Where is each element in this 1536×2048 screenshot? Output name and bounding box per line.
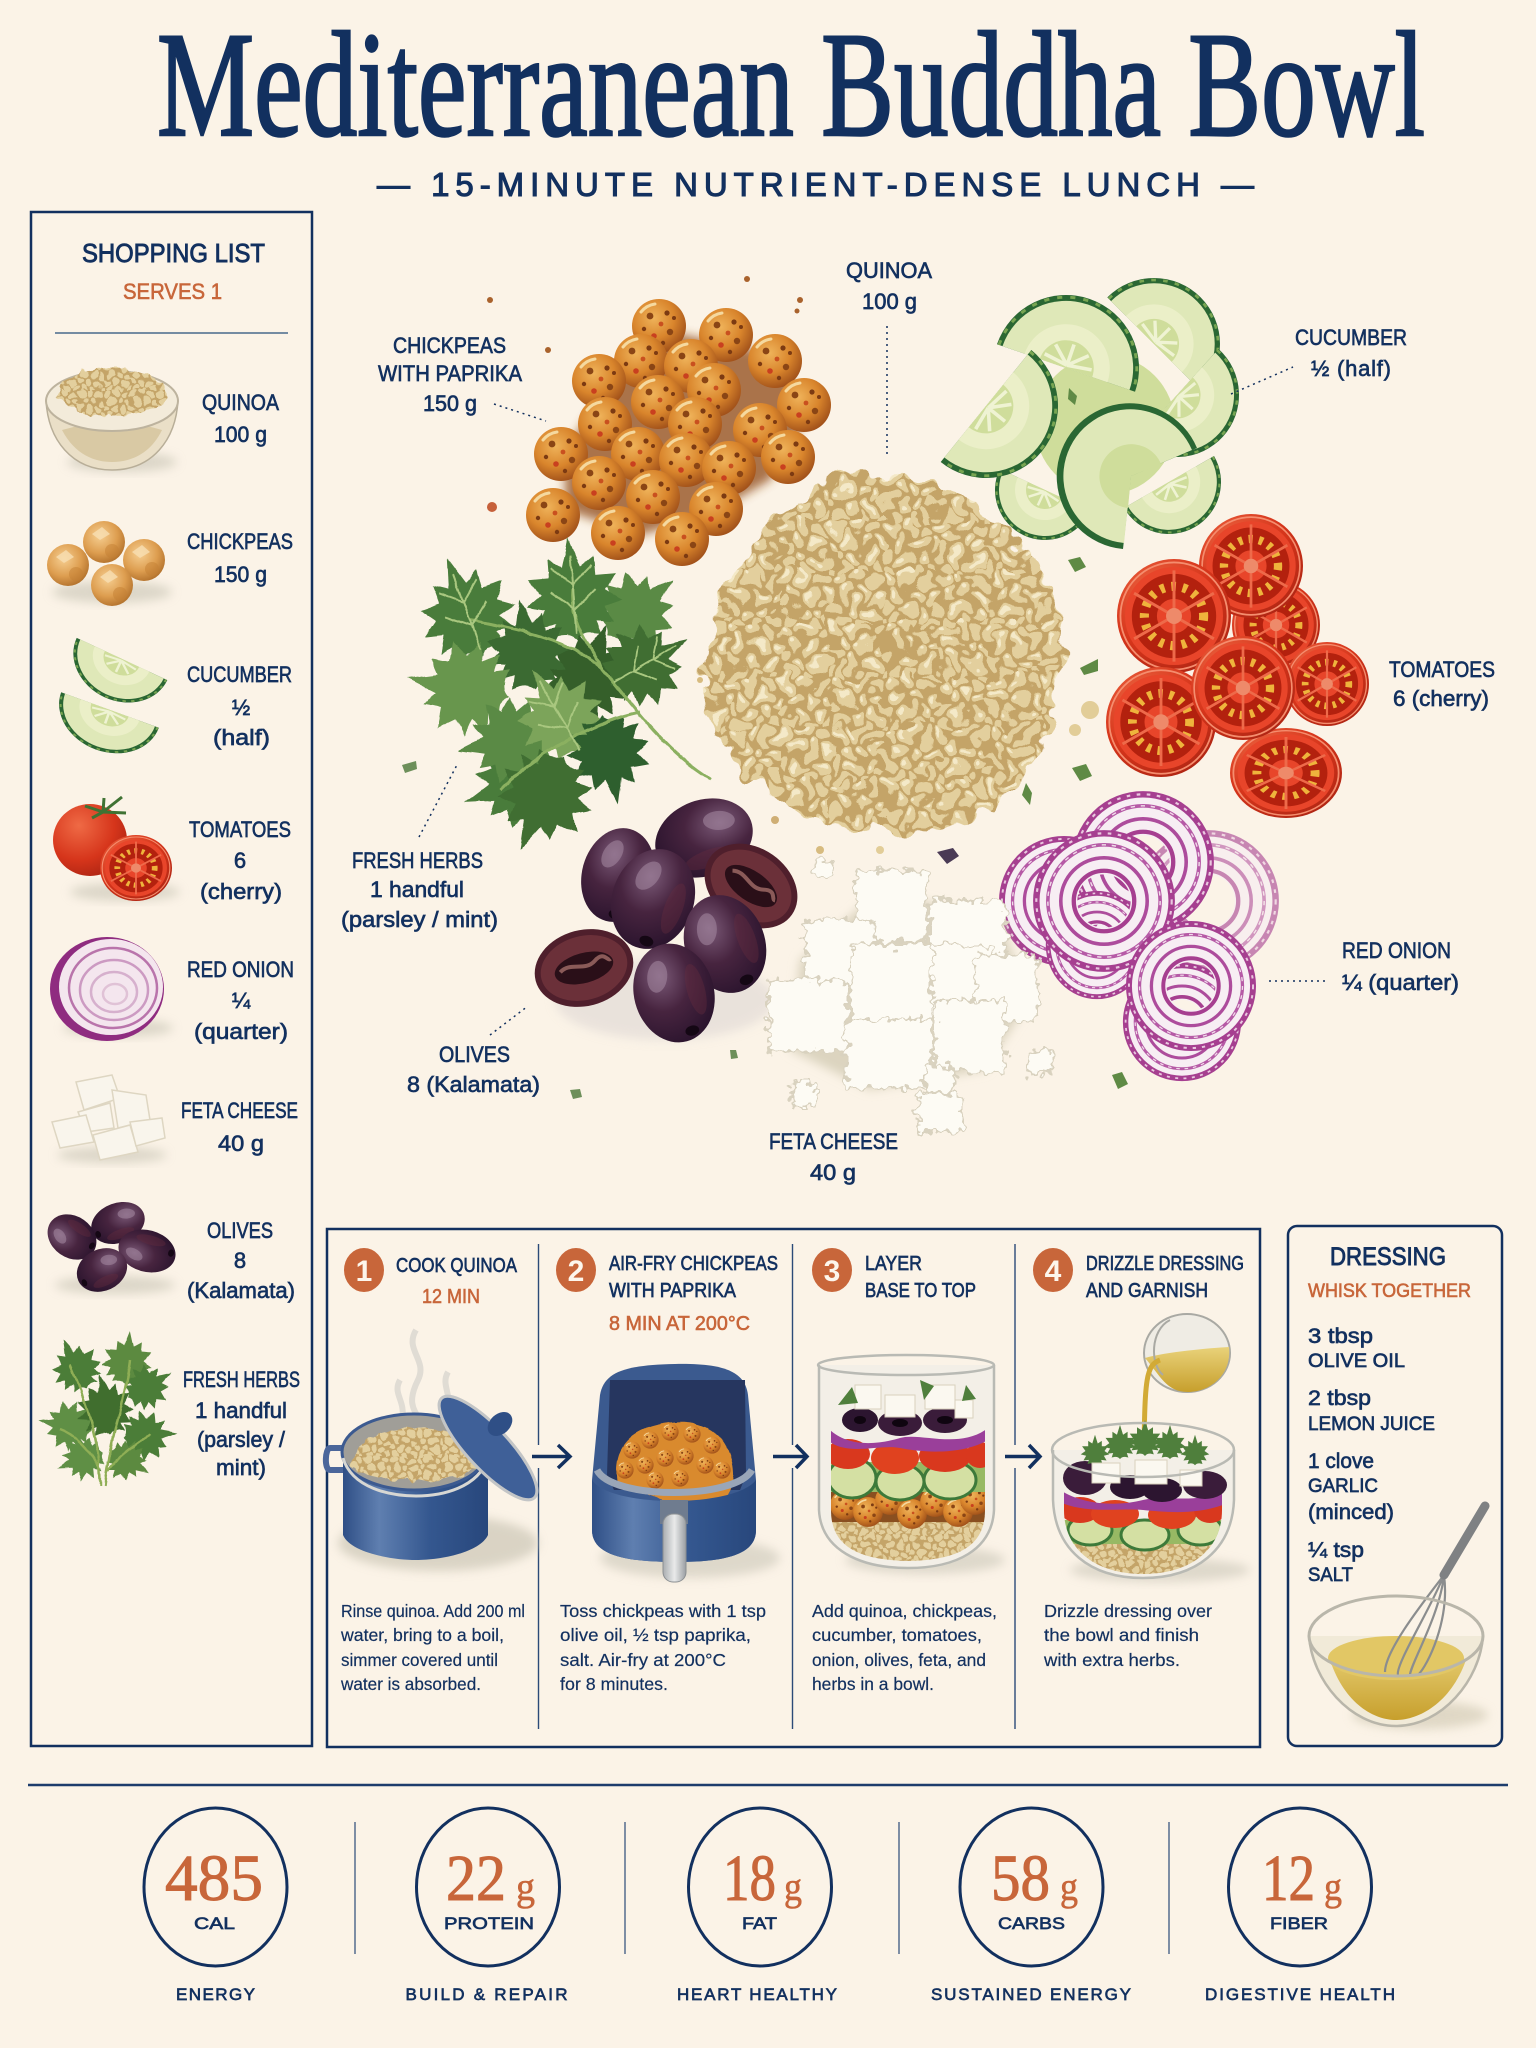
label: chickpeas 150 g	[187, 529, 293, 587]
label: cucumber 1/2 half: ½	[232, 695, 250, 720]
step 2	[556, 1248, 780, 1694]
step number 4	[1033, 1248, 1073, 1292]
step 1 instructions	[340, 1601, 525, 1694]
label: olives 8 kalamata: (Kalamata)	[187, 1278, 295, 1303]
step 2 instructions: for 8 minutes.	[560, 1674, 668, 1694]
label: cucumber 1/2 half	[187, 662, 292, 750]
item: fresh herbs	[34, 1329, 300, 1491]
illustration: olives	[526, 785, 814, 1052]
stat: fat: 18	[723, 1842, 776, 1915]
step 2 instructions: olive oil, ½ tsp paprika,	[560, 1625, 751, 1645]
item: tomatoes	[53, 797, 291, 904]
label: olives 8 kalamata: OLIVES	[207, 1218, 273, 1243]
step 3 instructions: Add quinoa, chickpeas,	[812, 1601, 997, 1621]
ingredient: lemon juice: 2 tbsp	[1308, 1387, 1371, 1410]
label: fresh herbs: (parsley / mint)	[341, 907, 498, 932]
label: red onion 1/4 quarter: RED ONION	[187, 957, 294, 982]
label: fresh herbs 1 handful: 1 handful	[195, 1398, 287, 1423]
step 4	[1033, 1248, 1250, 1670]
step 2 instructions: salt. Air-fry at 200°C	[560, 1650, 726, 1670]
ingredient: salt: ¼ tsp	[1308, 1539, 1364, 1562]
stat: fat: g	[784, 1864, 802, 1909]
label: olives	[407, 1042, 540, 1097]
stat: protein: BUILD & REPAIR	[406, 1985, 568, 2004]
label: fresh herbs 1 handful: FRESH HERBS	[183, 1367, 300, 1392]
step 3 heading: BASE TO TOP	[865, 1280, 976, 1302]
stat: fiber: FIBER	[1270, 1914, 1328, 1933]
stat: fat: HEART HEALTHY	[677, 1985, 837, 2004]
shopping list heading: SHOPPING LIST	[82, 238, 265, 268]
step 4 instructions: Drizzle dressing over	[1044, 1601, 1212, 1621]
panel: shopping list	[31, 212, 312, 1746]
step number 3	[812, 1248, 852, 1292]
icon: tomatoes	[53, 797, 180, 901]
stat: protein: g	[516, 1864, 535, 1909]
item: olives	[39, 1195, 295, 1303]
stat: protein: 22	[446, 1842, 506, 1915]
whisk together subheading: WHISK TOGETHER	[1308, 1281, 1471, 1302]
label: olives: OLIVES	[439, 1042, 510, 1067]
arrow 3	[1005, 1445, 1040, 1468]
label: fresh herbs 1 handful: mint)	[216, 1455, 266, 1480]
icon: chickpeas	[47, 521, 172, 606]
label: chickpeas with paprika: 150 g	[423, 391, 477, 416]
label: chickpeas with paprika	[378, 333, 522, 416]
step 1 heading: COOK QUINOA	[396, 1255, 518, 1277]
icon: herb sprig	[34, 1329, 183, 1491]
label: chickpeas with paprika: WITH PAPRIKA	[378, 361, 522, 386]
label: tomatoes 6 cherry: (cherry)	[200, 879, 282, 904]
label: fresh herbs 1 handful: (parsley /	[197, 1427, 286, 1452]
label: quinoa: 100 g	[862, 289, 917, 314]
step 4 heading	[1086, 1253, 1244, 1302]
ingredient: garlic: (minced)	[1308, 1501, 1394, 1524]
step number 3: 3	[824, 1255, 840, 1288]
step 1 instructions: Rinse quinoa. Add 200 ml	[341, 1601, 525, 1621]
label: quinoa	[846, 258, 932, 314]
illustration: fresh parsley	[399, 533, 710, 870]
icon: red onion	[50, 937, 173, 1041]
stat: fat: FAT	[742, 1914, 777, 1933]
illustration: pot of quinoa with lid	[326, 1330, 550, 1571]
item: feta cheese	[52, 1075, 298, 1163]
illustration: air fryer with chickpeas	[592, 1364, 780, 1582]
label: quinoa 100 g: 100 g	[214, 422, 267, 447]
illustration: feta crumbles	[768, 860, 1052, 1132]
step 1 time: 12 MIN	[422, 1286, 480, 1308]
label: feta cheese 40 g: FETA CHEESE	[181, 1098, 298, 1123]
stat: fiber	[1205, 1808, 1395, 2004]
ingredient: garlic: 1 clove	[1308, 1450, 1374, 1473]
stat: fiber: DIGESTIVE HEALTH	[1205, 1985, 1395, 2004]
arrow 1	[532, 1445, 570, 1468]
label: red onion	[1342, 938, 1459, 995]
step 2 heading: AIR-FRY CHICKPEAS	[609, 1253, 778, 1275]
illustration: dressing pitcher pouring	[1144, 1314, 1230, 1448]
stat: protein: PROTEIN	[444, 1914, 534, 1933]
icon: quinoa bowl	[46, 368, 178, 472]
label: fresh herbs: 1 handful	[370, 877, 464, 902]
label: tomatoes: TOMATOES	[1389, 657, 1495, 682]
serves label: SERVES 1	[123, 279, 222, 304]
step 4 instructions: the bowl and finish	[1044, 1625, 1199, 1645]
step 3 instructions: onion, olives, feta, and	[812, 1650, 986, 1670]
label: tomatoes: 6 (cherry)	[1393, 686, 1489, 711]
label: chickpeas 150 g: CHICKPEAS	[187, 529, 293, 554]
ingredient: olive oil: OLIVE OIL	[1308, 1351, 1405, 1372]
subtitle: — 15-MINUTE NUTRIENT-DENSE LUNCH —	[377, 166, 1254, 203]
label: red onion 1/4 quarter: ¼	[232, 988, 251, 1013]
ingredient: salt: SALT	[1308, 1565, 1353, 1586]
label: quinoa 100 g: QUINOA	[202, 390, 279, 415]
illustration: whisk in glass bowl	[1309, 1506, 1488, 1729]
label: cucumber 1/2 half: (half)	[213, 725, 270, 750]
panel: dressing	[1288, 1226, 1502, 1746]
ingredient: garlic	[1308, 1450, 1394, 1524]
stat: carbs: 58	[991, 1842, 1050, 1915]
step number 2: 2	[568, 1255, 584, 1288]
label: fresh herbs	[341, 848, 498, 932]
panel: ingredient arrangement	[341, 251, 1495, 1185]
illustration: quinoa pile	[706, 472, 1063, 831]
label: fresh herbs 1 handful	[183, 1367, 300, 1480]
item: chickpeas	[47, 521, 293, 606]
label: olives: 8 (Kalamata)	[407, 1072, 540, 1097]
step 2 heading: WITH PAPRIKA	[609, 1280, 737, 1302]
arrow 2	[773, 1445, 807, 1468]
ingredient: olive oil	[1308, 1325, 1405, 1372]
label: chickpeas 150 g: 150 g	[214, 562, 267, 587]
item: quinoa	[46, 368, 279, 472]
label: tomatoes	[1389, 657, 1495, 711]
icon: cucumber slices	[47, 638, 167, 767]
label: red onion 1/4 quarter: (quarter)	[194, 1019, 288, 1044]
illustration: cherry tomatoes	[1106, 514, 1369, 818]
step 3	[812, 1248, 1005, 1694]
illustration: cucumber slices	[941, 251, 1265, 556]
stat: fat	[677, 1808, 837, 2004]
ingredient: olive oil: 3 tbsp	[1308, 1325, 1373, 1348]
step 2 time: 8 MIN AT 200°C	[609, 1313, 750, 1335]
label: red onion 1/4 quarter	[187, 957, 294, 1044]
illustration: chickpeas	[526, 299, 831, 566]
label: tomatoes 6 cherry: TOMATOES	[189, 817, 291, 842]
illustration: red onion rings	[1002, 794, 1276, 1078]
label: feta cheese: FETA CHEESE	[769, 1129, 898, 1154]
label: fresh herbs: FRESH HERBS	[352, 848, 483, 873]
dressing heading: DRESSING	[1330, 1243, 1446, 1271]
stat: calories: ENERGY	[176, 1985, 255, 2004]
step 4 heading: DRIZZLE DRESSING	[1086, 1253, 1244, 1275]
stat: carbs: SUSTAINED ENERGY	[931, 1985, 1131, 2004]
item: red onion	[50, 937, 294, 1044]
label: quinoa 100 g	[202, 390, 279, 447]
scattered crumbs and herb flecks	[402, 276, 1128, 1099]
step 4 heading: AND GARNISH	[1086, 1280, 1208, 1302]
icon: olives	[39, 1195, 180, 1300]
stat: fiber: g	[1324, 1864, 1342, 1909]
stat: fiber: 12	[1262, 1842, 1315, 1915]
step 4 instructions: with extra herbs.	[1043, 1650, 1180, 1670]
ingredient: salt	[1308, 1539, 1364, 1586]
step 3 heading: LAYER	[865, 1253, 922, 1275]
label: feta cheese 40 g: 40 g	[218, 1131, 264, 1156]
label: cucumber: CUCUMBER	[1295, 325, 1407, 350]
icon: feta cubes	[52, 1075, 167, 1163]
label: olives 8 kalamata	[187, 1218, 295, 1303]
stat: calories	[144, 1808, 287, 2004]
label: tomatoes 6 cherry: 6	[234, 848, 246, 873]
ingredient: garlic: GARLIC	[1308, 1476, 1378, 1497]
step number 2	[556, 1248, 596, 1292]
step 3 instructions	[812, 1601, 997, 1694]
ingredient: lemon juice	[1308, 1387, 1435, 1435]
ingredient: lemon juice: LEMON JUICE	[1308, 1414, 1435, 1435]
step number 4: 4	[1045, 1255, 1062, 1288]
illustration: finished buddha bowl	[1052, 1420, 1250, 1582]
label: tomatoes 6 cherry	[189, 817, 291, 904]
step 3 heading	[865, 1253, 976, 1302]
stat: calories: CAL	[194, 1914, 235, 1933]
step 4 instructions	[1043, 1601, 1212, 1670]
label: olives 8 kalamata: 8	[234, 1248, 246, 1273]
step 2 instructions	[560, 1601, 766, 1694]
step 1 instructions: simmer covered until	[341, 1650, 498, 1670]
item: cucumber	[47, 638, 292, 767]
illustration: layered glass bowl	[818, 1355, 1005, 1574]
stat: calories: 485	[165, 1842, 263, 1915]
label: feta cheese	[769, 1129, 898, 1185]
step 2 heading	[609, 1253, 778, 1302]
label: cucumber 1/2 half: CUCUMBER	[187, 662, 292, 687]
label: cucumber: ½ (half)	[1311, 356, 1391, 381]
panel: preparation steps	[326, 1229, 1260, 1747]
label: cucumber	[1295, 325, 1407, 381]
label: red onion: ¼ (quarter)	[1342, 970, 1459, 995]
step 3 instructions: cucumber, tomatoes,	[812, 1625, 982, 1645]
step 1 instructions: water is absorbed.	[340, 1674, 481, 1694]
label: chickpeas with paprika: CHICKPEAS	[393, 333, 506, 358]
step 2 instructions: Toss chickpeas with 1 tsp	[560, 1601, 766, 1621]
step number 1: 1	[356, 1255, 372, 1288]
stat: protein	[406, 1808, 568, 2004]
step number 1	[344, 1248, 384, 1292]
label: red onion: RED ONION	[1342, 938, 1451, 963]
label: feta cheese 40 g	[181, 1098, 298, 1156]
step 3 instructions: herbs in a bowl.	[812, 1674, 934, 1694]
label: feta cheese: 40 g	[810, 1160, 856, 1185]
step 1 instructions: water, bring to a boil,	[340, 1625, 504, 1645]
stat: carbs: CARBS	[998, 1914, 1065, 1933]
stat: carbs: g	[1060, 1864, 1078, 1909]
step 1	[326, 1248, 550, 1694]
panel: nutrition facts	[28, 1785, 1508, 2004]
label: quinoa: QUINOA	[846, 258, 932, 283]
stat: carbs	[931, 1808, 1131, 2004]
